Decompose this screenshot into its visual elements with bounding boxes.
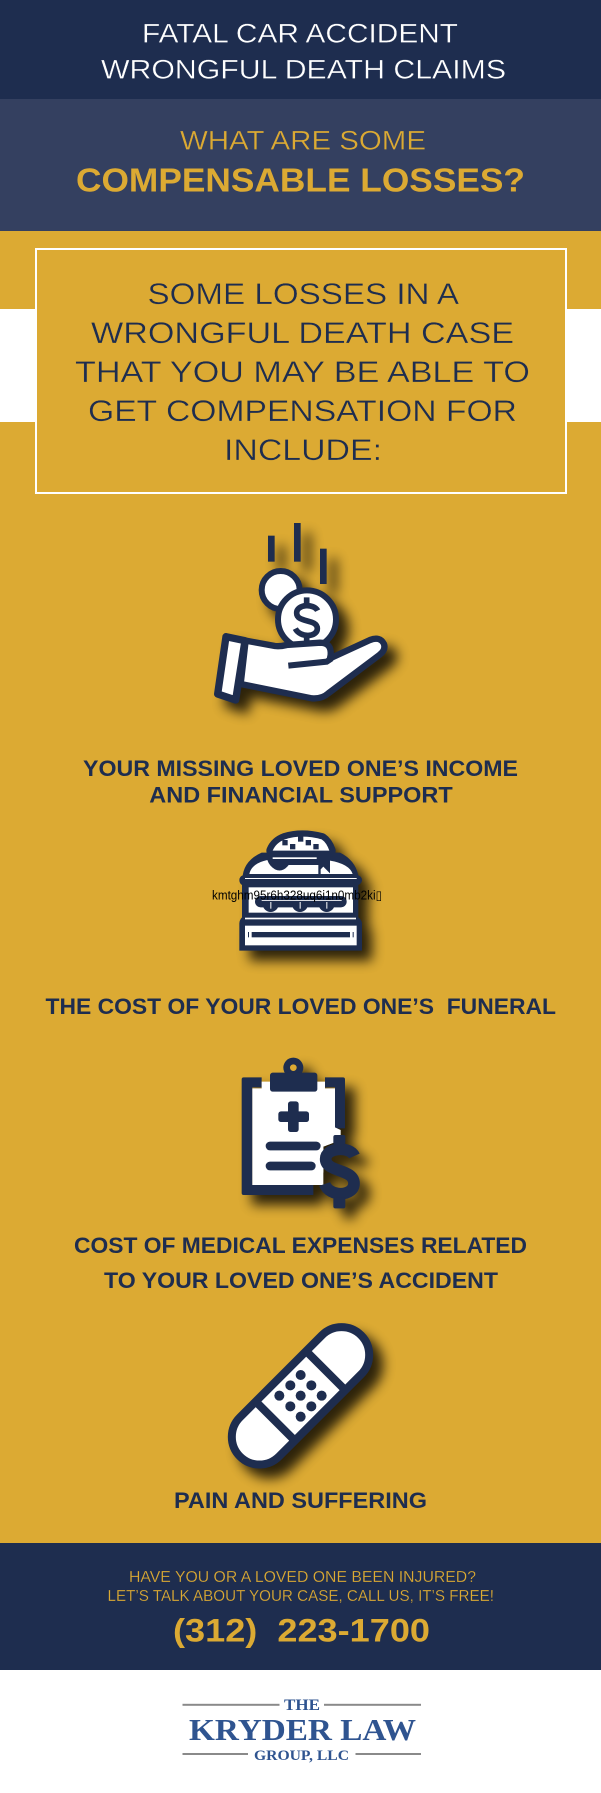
- heading: title: FATAL CAR ACCIDENT: [142, 19, 458, 49]
- icon: medical bill: [242, 1058, 354, 1208]
- white side strips: [0, 309, 601, 422]
- intro text: [75, 278, 530, 467]
- panel: intro box: [36, 249, 566, 493]
- panel: title band: [0, 0, 601, 99]
- label: pain: PAIN AND SUFFERING: [174, 1488, 427, 1513]
- label: medical: COST OF MEDICAL EXPENSES RELATED: [74, 1233, 527, 1258]
- icon: hand with coins: [218, 523, 384, 700]
- icon: casket: [239, 836, 362, 951]
- label: medical: [74, 1233, 527, 1293]
- panel: question band: [0, 99, 601, 231]
- intro text: GET COMPENSATION FOR: [88, 395, 517, 428]
- intro text: SOME LOSSES IN A: [148, 278, 459, 311]
- phone number: (312) 223-1700: [173, 1613, 430, 1649]
- heading: question: [76, 126, 525, 200]
- label: income: [83, 756, 518, 807]
- logo: The Kryder Law Group: KRYDER LAW: [189, 1712, 416, 1747]
- heading: title: WRONGFUL DEATH CLAIMS: [101, 55, 506, 85]
- call to action text: [108, 1569, 494, 1605]
- heading: question: WHAT ARE SOME: [180, 126, 426, 156]
- label: medical: TO YOUR LOVED ONE’S ACCIDENT: [104, 1268, 499, 1293]
- call to action text: LET’S TALK ABOUT YOUR CASE, CALL US, IT’S FREE!: [108, 1588, 494, 1605]
- intro text: INCLUDE:: [224, 434, 382, 467]
- heading: title: [101, 19, 506, 85]
- call to action text: HAVE YOU OR A LOVED ONE BEEN INJURED?: [129, 1569, 476, 1586]
- intro text: THAT YOU MAY BE ABLE TO: [75, 356, 530, 389]
- icon: bandage: [220, 1316, 381, 1476]
- label: income: YOUR MISSING LOVED ONE’S INCOME: [83, 756, 518, 781]
- panel: call to action: [0, 1543, 601, 1670]
- label: funeral: THE COST OF YOUR LOVED ONE’S FUNERAL: [46, 994, 556, 1019]
- intro text: WRONGFUL DEATH CASE: [91, 317, 514, 350]
- label: income: AND FINANCIAL SUPPORT: [149, 782, 453, 807]
- logo: The Kryder Law Group: GROUP, LLC: [254, 1748, 349, 1764]
- logo: The Kryder Law Group: [182, 1697, 421, 1764]
- glitch text over casket: kmtghm95r6h328uq6i1n0mb2ki▯: [212, 888, 382, 902]
- logo: The Kryder Law Group: THE: [284, 1697, 320, 1714]
- panel: gold background: [0, 231, 601, 1543]
- heading: question: COMPENSABLE LOSSES?: [76, 163, 525, 200]
